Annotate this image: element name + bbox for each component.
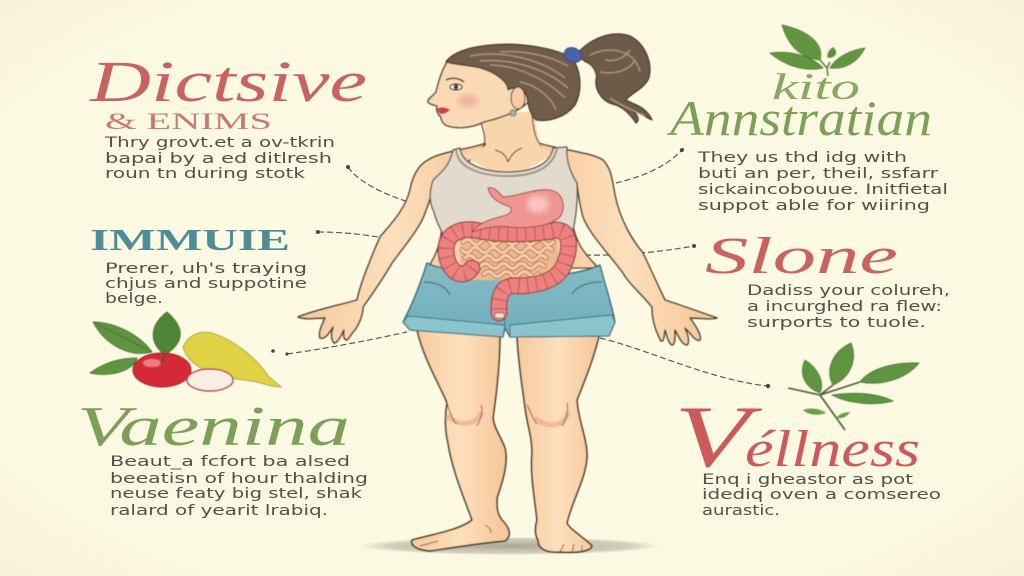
heading: IMMUIE: IMMUIE: [90, 222, 290, 257]
hair tie: [562, 45, 584, 65]
right leg: [517, 332, 600, 552]
text block: wellness: [702, 472, 941, 519]
text block: wellness: aurastic.: [702, 503, 780, 519]
text block: vaenina: ralard of yearit lrabiq.: [110, 503, 328, 519]
small intestine: [460, 236, 558, 280]
text block: annotation: sickaincobouue. Initfietal: [698, 182, 948, 198]
hair: [446, 44, 580, 120]
text block: vaenina: neuse featy big stel, shak: [110, 486, 363, 502]
callout line: digestive: [346, 165, 414, 205]
text block: annotation: They us thd idg with: [697, 150, 907, 166]
text block: slone: a incurghed ra flew:: [747, 299, 942, 315]
text block: annotation: suppot able for wiiring: [698, 198, 930, 214]
heading: Vellness: [674, 389, 920, 486]
tank neckline: [456, 148, 557, 176]
ponytail: [576, 34, 652, 123]
woman figure: [298, 34, 717, 552]
text block: annotation: buti an per, theil, ssfarr: [698, 166, 938, 182]
text block: wellness: Enq i gheastor as pot: [702, 472, 914, 488]
text block: immune: chjus and suppotine: [105, 276, 307, 292]
tank top: [430, 147, 577, 238]
shorts: [403, 263, 615, 337]
large intestine: [446, 230, 569, 318]
callout line: annotation: [605, 148, 684, 187]
text block: immune: Prerer, uh's traying: [105, 261, 307, 277]
text block: slone: Dadiss your colureh,: [747, 283, 950, 299]
heading: Vellness: éllness: [745, 421, 920, 478]
text block: vaenina: Beaut_a fcfort ba alsed: [110, 454, 350, 470]
text block: digestive: bapai by a ed ditlresh: [105, 151, 332, 167]
heading: Slone: Slone: [705, 228, 898, 285]
icon: fruit and leaves: [90, 312, 281, 391]
text block: immune: [105, 261, 307, 307]
callout line: wellness: [600, 338, 770, 388]
text block: digestive: roun tn during stotk: [105, 166, 306, 182]
head: [428, 61, 530, 128]
text block: annotation: [697, 150, 948, 214]
heading: Vellness: V: [674, 389, 763, 486]
stomach: [472, 188, 563, 232]
text block: vaenina: [110, 454, 368, 519]
text block: wellness: idediq oven a comsereo: [702, 487, 941, 503]
subheading: & ENIMS: & ENIMS: [105, 109, 272, 134]
neck and chest: [462, 112, 553, 180]
midriff: [428, 226, 598, 268]
callout line: stone: [585, 244, 696, 255]
text block: slone: [747, 283, 950, 331]
heading: Annstratian: Annstratian: [667, 90, 932, 146]
right arm: [538, 143, 717, 345]
text block: digestive: [104, 135, 335, 182]
left arm: [298, 143, 487, 343]
text block: vaenina: beeatisn of hour thalding: [110, 471, 368, 487]
heading: Dictsive: Dictsive: [89, 49, 367, 114]
callout line: immune: [316, 230, 378, 237]
face details: [437, 78, 525, 116]
heading: Vaenina: Vaenina: [77, 396, 350, 458]
ground shadow: [358, 537, 662, 555]
text block: digestive: Thry grovt.et a ov-tkrin: [104, 135, 335, 151]
icon: branch with leaves: [788, 343, 919, 430]
left leg: [412, 330, 509, 551]
callout line: vitamins: [271, 332, 407, 356]
text block: slone: surports to tuole.: [747, 315, 926, 331]
icon: top leaves: [770, 25, 865, 76]
heading: kito: kito: [772, 67, 860, 108]
text block: immune: belge.: [105, 291, 163, 307]
